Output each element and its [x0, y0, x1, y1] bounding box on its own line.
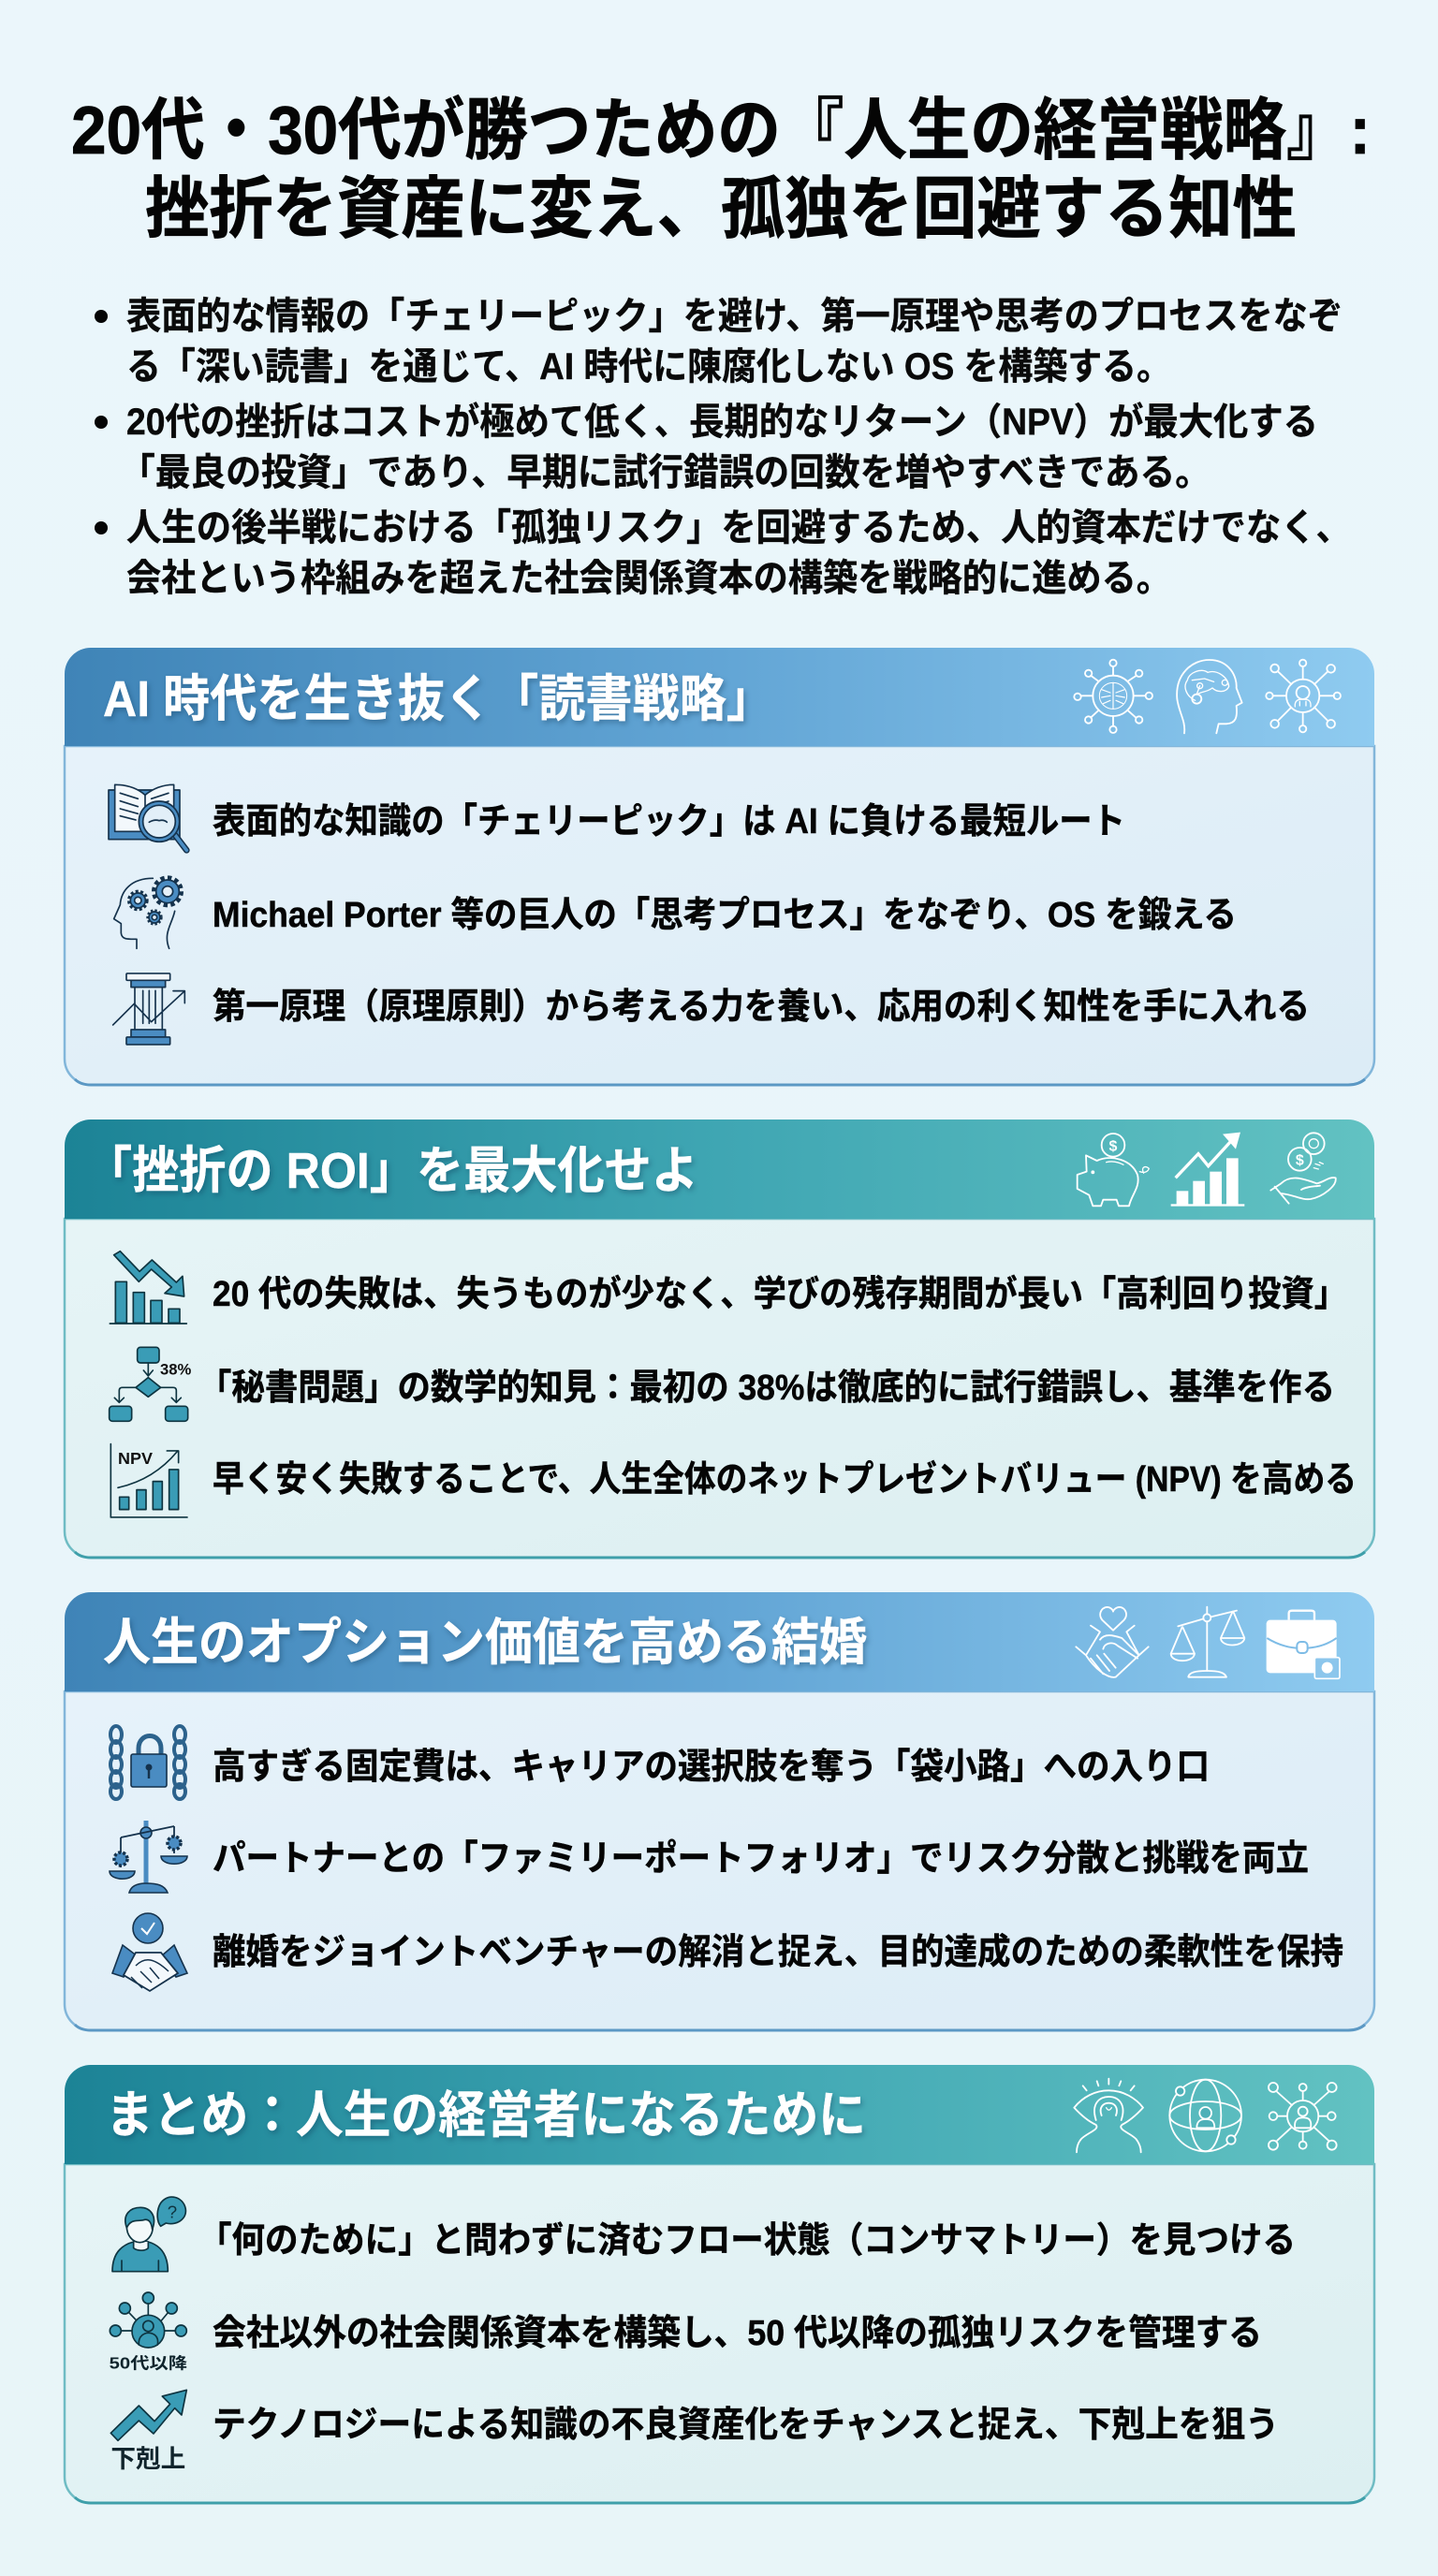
text: 「秘書問題」の数学的知見：最初の 38%は徹底的に試行錯誤し、基準を作る: [198, 1368, 1335, 1408]
icon: people network: [1269, 2083, 1337, 2150]
panel header bar: [65, 2065, 1374, 2164]
icon: padlock and chains: [110, 1726, 185, 1799]
row: first principles: [113, 973, 1310, 1045]
icon: briefcase: [1267, 1611, 1340, 1678]
row: secretary problem: [110, 1347, 1335, 1421]
icon: network 50代以降: [110, 2292, 188, 2373]
icon: NPV chart: NPV: [118, 1449, 153, 1468]
heading: 人生のオプション価値を高める結婚: [103, 1615, 867, 1671]
icon: person network: [1266, 660, 1341, 732]
panel body: [65, 1219, 1374, 1558]
bullet 2: [95, 402, 1318, 493]
icon: rising arrow 下剋上: [110, 2390, 186, 2473]
icon: NPV chart: [110, 1444, 187, 1517]
text: 「何のために」と問わずに済むフロー状態（コンサマトリー）を見つける: [198, 2221, 1296, 2261]
row: thinking process: [114, 878, 1237, 948]
icon: eye and person: [1074, 2079, 1143, 2152]
icon: scale with gears: [110, 1821, 187, 1893]
bullet 3: 人生の後半戦における「孤独リスク」を回避するため、人的資本だけでなく、: [126, 507, 1351, 549]
icon: balance scale: [1171, 1607, 1244, 1677]
icon: person with question bubble: [112, 2197, 185, 2272]
bullet 1: [95, 296, 1343, 388]
text: 離婚をジョイントベンチャーの解消と捉え、目的達成のための柔軟性を保持: [213, 1933, 1343, 1972]
text: パートナーとの「ファミリーポートフォリオ」でリスク分散と挑戦を両立: [213, 1839, 1309, 1879]
icon: handshake with heart: [1076, 1607, 1149, 1677]
panel body: [65, 2164, 1374, 2503]
panel header bar: [65, 1592, 1374, 1691]
icon: piggy bank: $: [1109, 1138, 1118, 1154]
icon: growth chart: [1171, 1133, 1244, 1207]
bullet 1: る「深い読書」を通じて、AI 時代に陳腐化しない OS を構築する。: [126, 346, 1171, 388]
panel: reading strategy: [65, 648, 1374, 1085]
text: 20 代の失敗は、失うものが少なく、学びの残存期間が長い「高利回り投資」: [213, 1275, 1347, 1314]
bullet 1: 表面的な情報の「チェリーピック」を避け、第一原理や思考のプロセスをなぞ: [126, 296, 1343, 337]
text: 高すぎる固定費は、キャリアの選択肢を奪う「袋小路」への入り口: [213, 1748, 1210, 1787]
text: テクノロジーによる知識の不良資産化をチャンスと捉え、下剋上を狙う: [213, 2406, 1279, 2445]
icon: person with question bubble: ?: [168, 2202, 177, 2221]
icon: handshake with check: [112, 1913, 187, 1991]
icon: rising arrow 下剋上: 下剋上: [110, 2445, 185, 2473]
icon: coins and hand: [1270, 1133, 1336, 1204]
panel body: [65, 1691, 1374, 2030]
icon: pillar and arrow: [113, 973, 184, 1045]
panel body: [65, 746, 1374, 1085]
panel header bar: [65, 1120, 1374, 1219]
panel: ROI of failure: [65, 1120, 1374, 1558]
heading: 「挫折の ROI」を最大化せよ: [85, 1143, 698, 1199]
icon: decision flowchart 38%: 38%: [160, 1360, 192, 1378]
icon: coins and hand: $: [1296, 1152, 1304, 1168]
panel: marriage option value: [65, 1592, 1374, 2030]
icon: piggy bank: [1078, 1134, 1149, 1206]
icon: head with gears: [114, 878, 182, 948]
row: social capital: [110, 2292, 1262, 2373]
text: 第一原理（原理原則）から考える力を養い、応用の利く知性を手に入れる: [213, 988, 1310, 1027]
title: 20代・30代が勝つための『人生の経営戦略』:: [71, 94, 1371, 168]
text: Michael Porter 等の巨人の「思考プロセス」をなぞり、OS を鍛える: [213, 896, 1237, 935]
panel: summary: [65, 2065, 1374, 2503]
heading: AI 時代を生き抜く「読書戦略」: [103, 671, 773, 727]
summary bullet list: [95, 296, 1351, 599]
row: joint venture: [112, 1913, 1343, 1991]
icon: head with brain: [1177, 660, 1242, 733]
panel header bar: [65, 648, 1374, 746]
icon: network 50代以降: 50代以降: [110, 2354, 188, 2373]
row: high yield investment: [110, 1251, 1347, 1324]
icon: globe with person: [1169, 2080, 1241, 2151]
bullet 2: 20代の挫折はコストが極めて低く、長期的なリターン（NPV）が最大化する: [126, 402, 1318, 443]
icon: book and magnifier: [109, 784, 186, 850]
row: cherry pick: [109, 784, 1125, 850]
bullet 3: [95, 507, 1351, 599]
text: 会社以外の社会関係資本を構築し、50 代以降の孤独リスクを管理する: [213, 2314, 1262, 2353]
row: family portfolio: [110, 1821, 1309, 1893]
bullet 3: 会社という枠組みを超えた社会関係資本の構築を戦略的に進める。: [126, 558, 1171, 599]
row: fixed costs: [110, 1726, 1210, 1799]
row: flow state: [112, 2197, 1296, 2272]
title: 挫折を資産に変え、孤独を回避する知性: [145, 172, 1297, 247]
icon: falling arrow over bars: [110, 1251, 186, 1324]
icon: brain network: [1074, 660, 1152, 733]
bullet 2: 「最良の投資」であり、早期に試行錯誤の回数を増やすべきである。: [120, 452, 1211, 493]
row: gekokujo: [110, 2390, 1279, 2473]
icon: decision flowchart 38%: [110, 1347, 192, 1421]
text: 表面的な知識の「チェリーピック」は AI に負ける最短ルート: [213, 802, 1125, 842]
title: [71, 94, 1371, 247]
row: NPV: [110, 1444, 1357, 1517]
heading: まとめ：人生の経営者になるために: [106, 2087, 866, 2144]
